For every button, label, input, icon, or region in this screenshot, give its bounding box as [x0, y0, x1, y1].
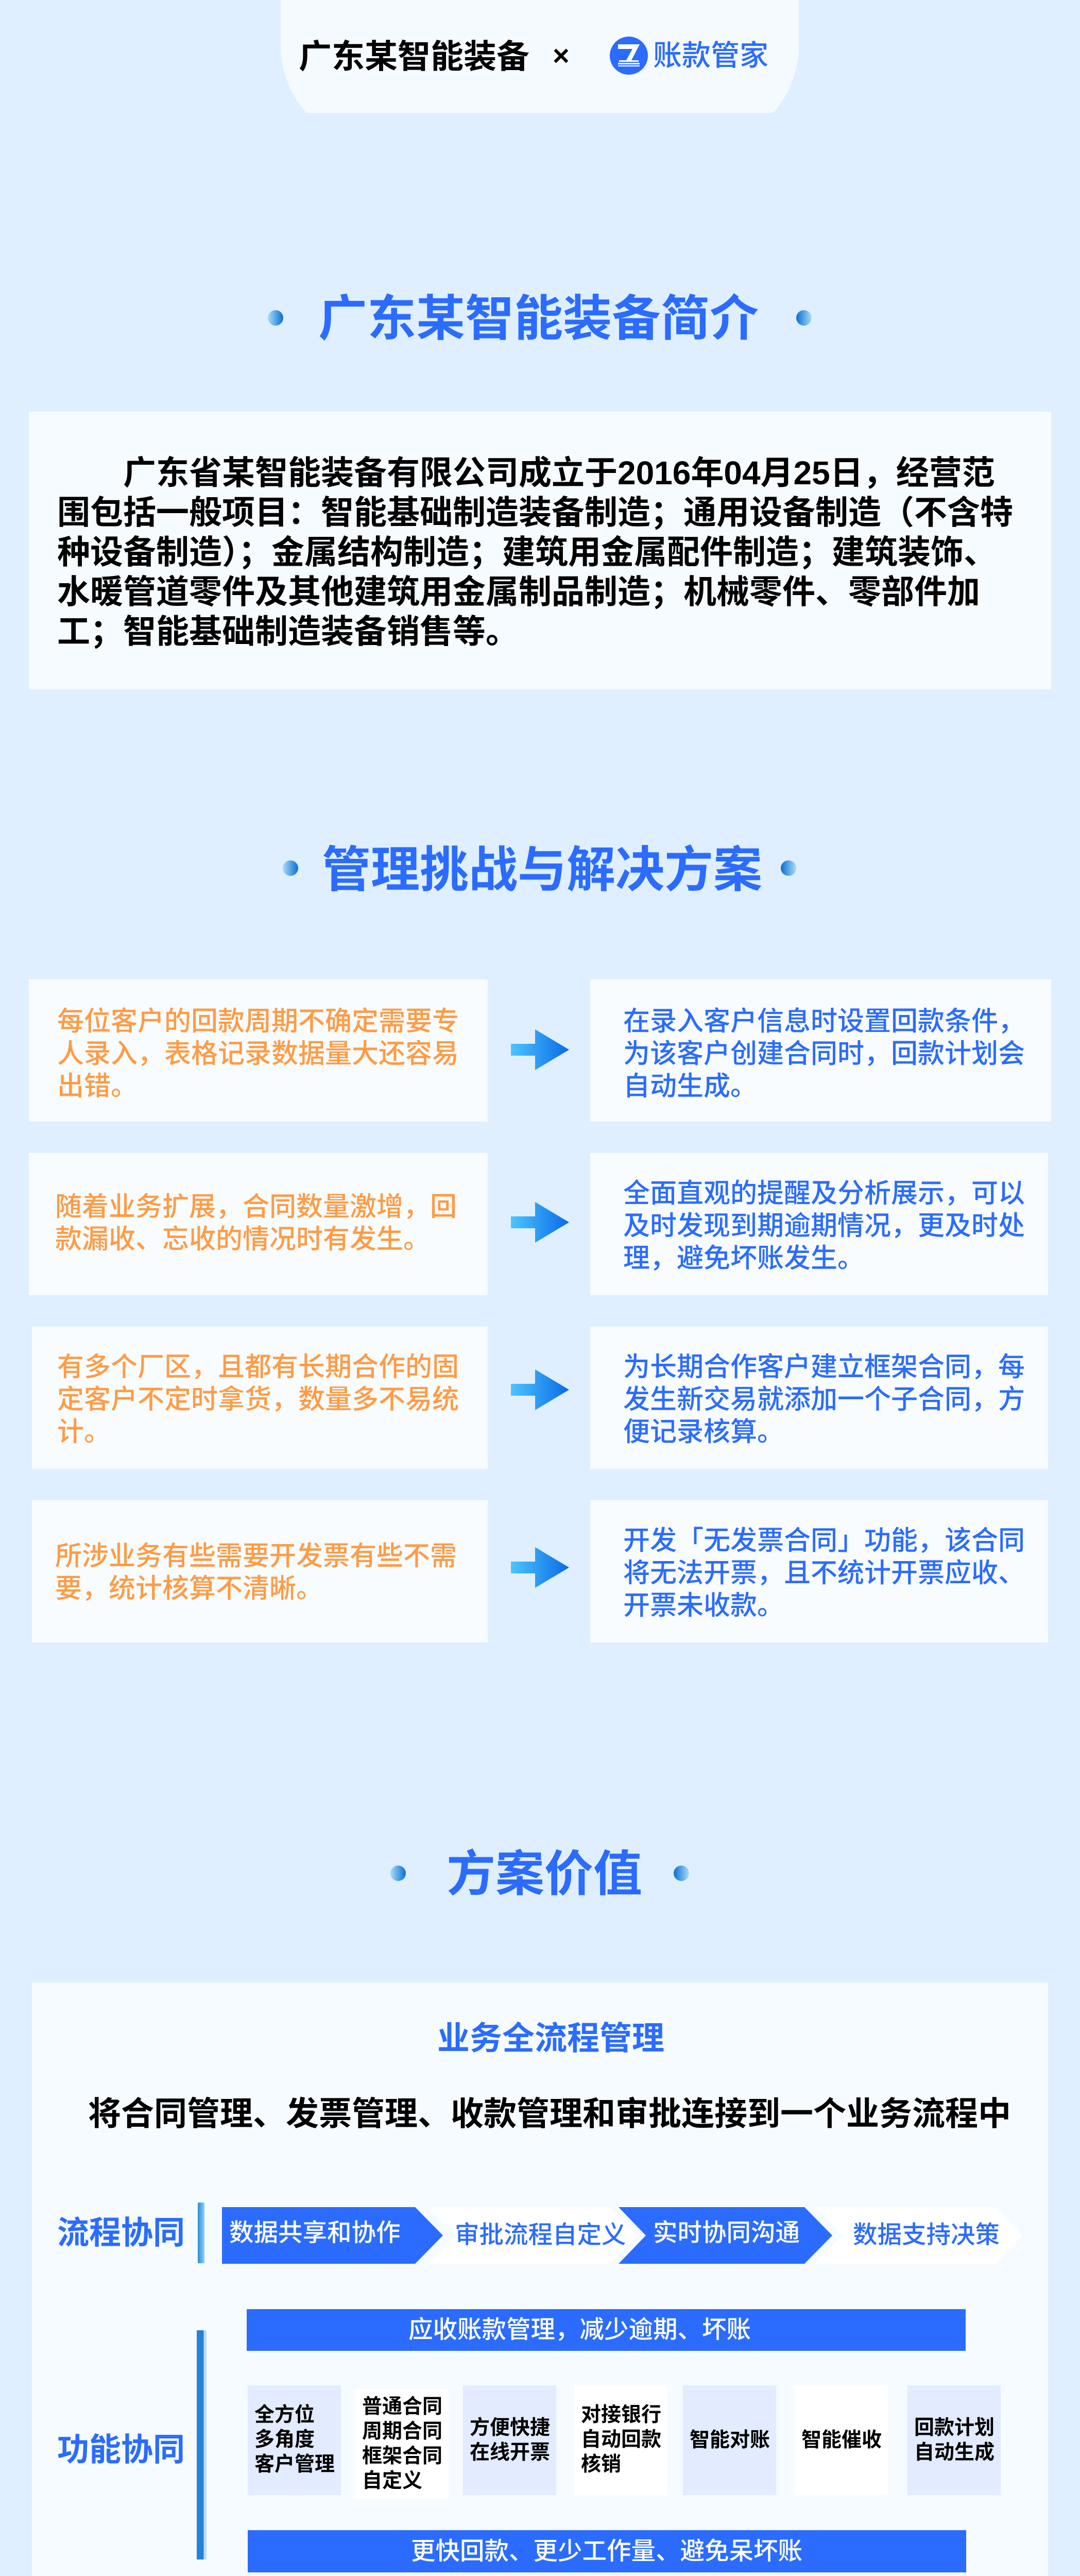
challenge card 2 [29, 1153, 488, 1295]
cell: invoices: 在线开票 [470, 2442, 550, 2464]
challenge card 4 [32, 1500, 488, 1642]
challenge card 2: 款漏收、忘收的情况时有发生。 [55, 1225, 430, 1255]
cell: payment plan [907, 2385, 1001, 2495]
top banner: receivables [247, 2309, 966, 2351]
cell: reconciliation [683, 2385, 776, 2495]
solution card 3: 便记录核算。 [623, 1417, 784, 1447]
cell: contracts: 普通合同 [362, 2396, 442, 2418]
solution card 2: 及时发现到期逾期情况，更及时处 [623, 1211, 1025, 1241]
cell: contracts [355, 2389, 449, 2499]
solution card 2: 全面直观的提醒及分析展示，可以 [623, 1179, 1025, 1209]
header company name: 广东某智能装备 [299, 38, 529, 75]
solution card 2: 理，避免坏账发生。 [623, 1244, 864, 1274]
arrow 3 [511, 1369, 569, 1410]
arrow 4 [511, 1547, 569, 1588]
intro text: 种设备制造）；金属结构制造；建筑用金属配件制造；建筑装饰、 [57, 534, 997, 571]
cell: invoices [463, 2385, 556, 2495]
icon: logo [610, 37, 648, 75]
cross symbol: × [553, 39, 570, 72]
intro text [57, 454, 1013, 650]
panel: solution value [32, 1982, 1048, 2576]
cell: customer management [248, 2385, 341, 2495]
challenge card 1: 每位客户的回款周期不确定需要专 [57, 1007, 459, 1037]
top banner: receivables: 应收账款管理，减少逾期、坏账 [408, 2316, 751, 2344]
solution card 3: 为长期合作客户建立框架合同，每 [623, 1352, 1025, 1382]
chevron: approval flow: 审批流程自定义 [455, 2222, 626, 2249]
heading: company intro: 广东某智能装备简介 [318, 292, 759, 346]
bottom banner: faster collection [248, 2530, 966, 2572]
intro text: 广东省某智能装备有限公司成立于2016年04月25日，经营范 [123, 454, 995, 492]
challenge card 2: 随着业务扩展，合同数量激增，回 [55, 1192, 457, 1222]
intro text: 水暖管道零件及其他建筑用金属制品制造；机械零件、零部件加 [57, 573, 980, 611]
solution card 1 [590, 979, 1051, 1122]
header panel [281, 0, 799, 113]
arrow 2 [511, 1202, 569, 1243]
cell: invoices: 方便快捷 [470, 2417, 550, 2439]
chevron: realtime communication: 实时协同沟通 [653, 2219, 800, 2247]
label: function: 功能协同 [57, 2432, 185, 2468]
challenge card 4: 要，统计核算不清晰。 [55, 1574, 323, 1604]
cell: bank write-off: 核销 [581, 2453, 621, 2476]
solution card 4: 将无法开票，且不统计开票应收、 [623, 1558, 1025, 1588]
challenge card 3: 有多个厂区，且都有长期合作的固 [57, 1352, 459, 1382]
cell: reconciliation: 智能对账 [690, 2429, 770, 2451]
solution card 3 [590, 1327, 1048, 1469]
intro text: 工；智能基础制造装备销售等。 [57, 613, 519, 650]
solution card 4: 开发「无发票合同」功能，该合同 [623, 1526, 1025, 1556]
chevron: approval flow [428, 2207, 637, 2264]
solution card 3: 发生新交易就添加一个子合同，方 [623, 1385, 1025, 1415]
panel: company intro [29, 412, 1051, 689]
solution card 4 [590, 1500, 1048, 1642]
logo wordmark: 账款管家 [653, 39, 768, 72]
chevron: data decision support [815, 2207, 1023, 2264]
heading: solution value [390, 1847, 689, 1902]
solution card 1: 为该客户创建合同时，回款计划会 [623, 1039, 1025, 1069]
intro text: 围包括一般项目：智能基础制造装备制造；通用设备制造（不含特 [57, 494, 1013, 531]
cell: collection: 智能催收 [801, 2429, 882, 2451]
cell: bank write-off: 对接银行 [581, 2404, 661, 2426]
cell: customer management: 多角度 [254, 2429, 315, 2451]
panel title: 业务全流程管理 [437, 2021, 664, 2057]
cell: bank write-off [574, 2385, 667, 2495]
cell: contracts: 周期合同 [362, 2420, 442, 2443]
solution card 2 [590, 1153, 1048, 1295]
cell: contracts: 框架合同 [362, 2445, 442, 2467]
challenge card 3 [32, 1327, 488, 1469]
chevron: data decision support: 数据支持决策 [853, 2222, 1000, 2249]
challenge card 3: 计。 [57, 1417, 111, 1447]
solution card 4: 开票未收款。 [623, 1591, 784, 1621]
challenge card 4: 所涉业务有些需要开发票有些不需 [55, 1541, 457, 1571]
bottom banner: faster collection: 更快回款、更少工作量、避免呆坏账 [411, 2538, 802, 2565]
challenge card 1 [29, 979, 488, 1122]
challenge card 1: 人录入，表格记录数据量大还容易 [57, 1039, 459, 1069]
challenge card 1: 出错。 [57, 1072, 138, 1101]
heading: solution value: 方案价值 [447, 1847, 642, 1902]
cell: customer management: 客户管理 [254, 2453, 335, 2476]
cell: payment plan: 回款计划 [914, 2417, 995, 2439]
cell: payment plan: 自动生成 [914, 2442, 995, 2464]
panel subtitle: 将合同管理、发票管理、收款管理和审批连接到一个业务流程中 [88, 2095, 1011, 2132]
cell: bank write-off: 自动回款 [581, 2429, 661, 2451]
arrow 1 [511, 1029, 569, 1070]
challenge card 3: 定客户不定时拿货，数量多不易统 [57, 1385, 459, 1415]
cell: contracts: 自定义 [362, 2470, 422, 2492]
cell: collection [795, 2385, 888, 2495]
heading: challenges and solutions: 管理挑战与解决方案 [322, 843, 762, 897]
solution card 1: 自动生成。 [623, 1072, 757, 1101]
chevron: data sharing [222, 2207, 443, 2264]
solution card 1: 在录入客户信息时设置回款条件， [623, 1007, 1025, 1037]
label: process: 流程协同 [57, 2215, 185, 2251]
cell: customer management: 全方位 [254, 2404, 315, 2426]
chevron: realtime communication [619, 2207, 832, 2264]
chevron: data sharing: 数据共享和协作 [229, 2219, 401, 2247]
